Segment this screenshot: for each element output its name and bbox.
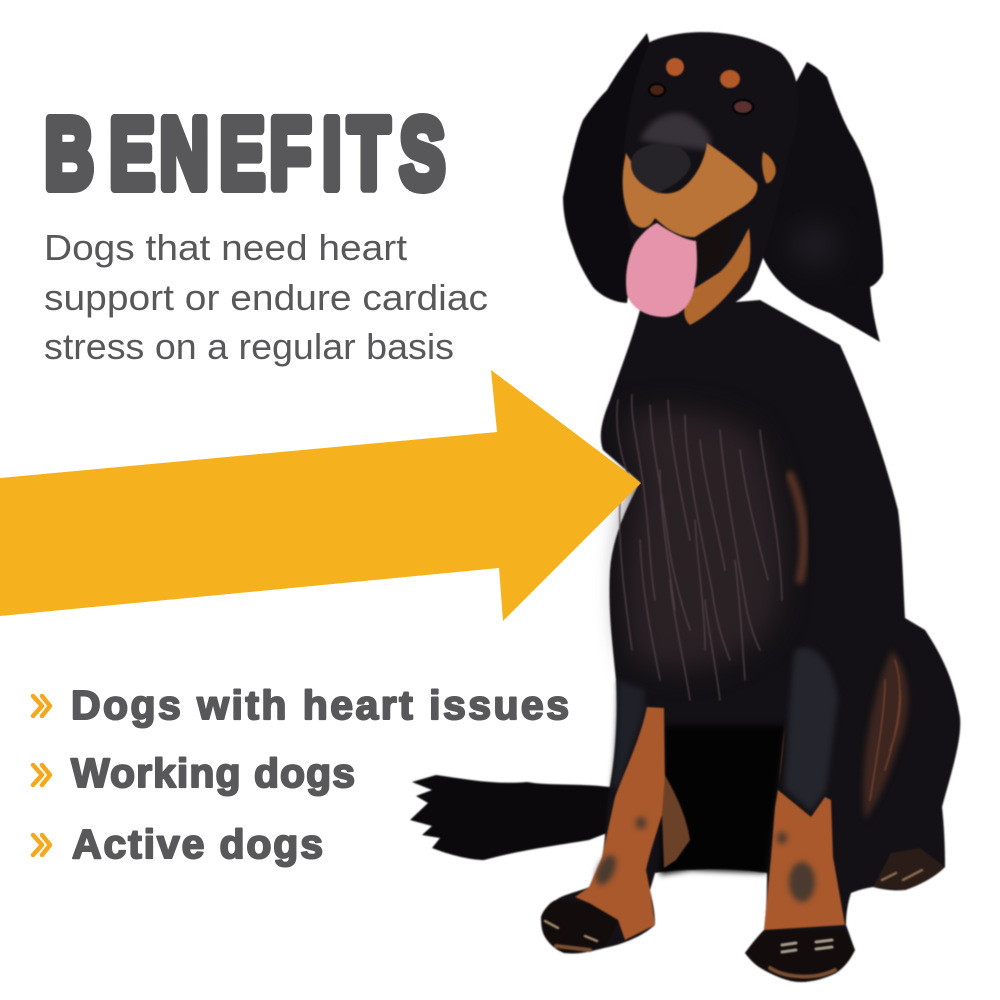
tan muzzle [623,143,757,237]
snout bridge [640,113,711,150]
text block: description: support or endure cardiac [44,277,488,318]
brow spots [663,55,740,88]
eyes [649,84,753,114]
rear fur brown [863,650,908,820]
shadow between legs [660,725,785,875]
rear paw [873,848,945,890]
bullet: active dogs: Active dogs [72,821,323,867]
head [622,32,799,316]
throat tan [684,228,750,325]
brown chest streaks [790,475,804,580]
left foreleg tan [575,707,665,940]
bullet: working dogs: Working dogs [71,750,355,796]
foreleg sheen right [784,648,838,812]
text block: description: stress on a regular basis [44,326,454,367]
rear paw fur [882,870,922,880]
body silhouette [541,300,960,982]
tongue [626,223,697,317]
nose [631,144,691,193]
rear fur strands [870,660,900,800]
right paw [745,930,855,982]
foreleg sheen left [612,680,645,790]
bullet: dogs with heart issues: Dogs with heart issues [71,682,569,728]
tail [410,775,615,860]
bullet list [33,682,569,867]
left paw [541,900,618,953]
right ear [755,62,883,342]
left paw fur [545,921,597,950]
chest shading [625,410,782,669]
arrow [0,370,641,621]
right ear sheen [790,223,840,267]
title: BENEFITS [45,99,445,210]
right foreleg tan [764,723,845,930]
right paw fur [770,940,835,977]
cheek spot [762,152,776,183]
illustration: dog [410,32,960,982]
text block: description [44,227,488,367]
fringe behind left foreleg [662,775,690,868]
text block: description: Dogs that need heart [44,227,407,268]
foreleg dark patches [592,817,815,902]
mouth [695,217,732,278]
left ear [563,33,665,303]
chest fur [617,395,782,700]
